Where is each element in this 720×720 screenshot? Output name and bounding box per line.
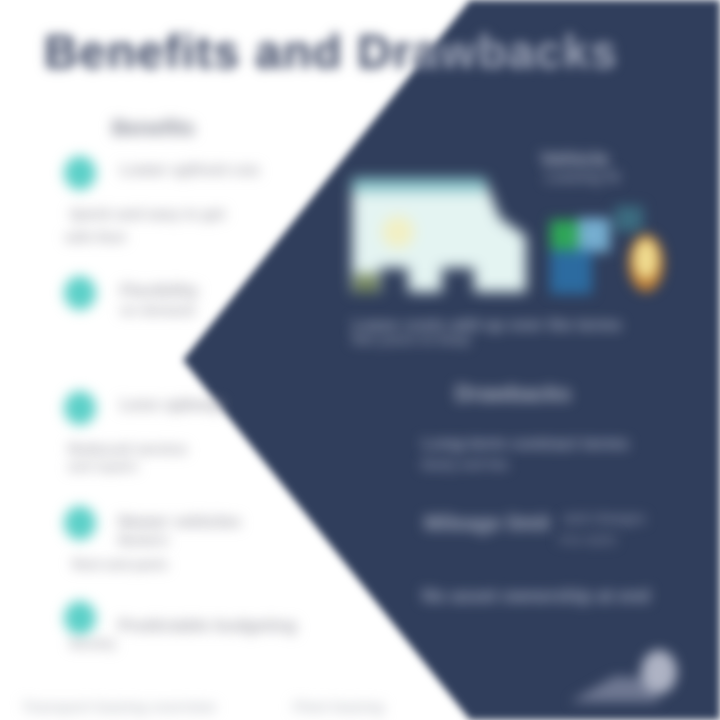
heading: drawbacks list: Drawbacks xyxy=(455,381,571,406)
panel: drawbacks: Not yours to keep xyxy=(352,331,470,347)
benefit 2 text: Flexibility xyxy=(120,281,198,300)
illustration: truck xyxy=(341,168,537,303)
footer right: Fleet leasing xyxy=(293,699,384,716)
drawback 1 xyxy=(418,433,632,475)
benefit 3: Reduced service xyxy=(68,441,187,458)
benefit 3 xyxy=(55,382,226,477)
icon: check xyxy=(64,506,96,540)
benefit 4 text: Newer vehicles xyxy=(118,512,241,531)
benefit 2: on demand xyxy=(120,302,195,318)
drawback 2 xyxy=(418,508,646,548)
benefit 1 detail xyxy=(63,204,228,248)
benefit 4: Modern xyxy=(118,532,169,548)
benefit 5 xyxy=(55,592,300,654)
illustration: person xyxy=(542,200,648,301)
panel: drawbacks: Leasing fit xyxy=(545,169,620,186)
benefit 1 detail: Quick and easy to get xyxy=(70,206,225,223)
icon: check xyxy=(64,276,96,310)
title: Benefits and Drawbacks xyxy=(44,25,618,78)
heading: drawbacks: Vehicle xyxy=(540,149,609,171)
heading: benefits: Benefits xyxy=(112,117,195,140)
icon: check xyxy=(64,391,96,425)
drawback 2: Mileage limit xyxy=(424,512,550,535)
panel: benefits xyxy=(22,113,385,717)
drawback 1: Early exit fee xyxy=(422,456,508,472)
benefit 5 text: Predictable budgeting xyxy=(118,616,297,635)
icon: check xyxy=(64,156,96,190)
title: Benefits and Drawbacks xyxy=(44,25,618,78)
icon: check xyxy=(64,601,96,635)
benefit 3: and repairs xyxy=(68,459,138,474)
benefit 1 xyxy=(55,147,262,199)
panel: drawbacks xyxy=(341,146,672,350)
footer left: Transport leasing overview xyxy=(22,699,215,716)
drawback 3: No asset ownership at end xyxy=(422,586,650,606)
illustration: coin xyxy=(620,226,672,300)
benefit 2 xyxy=(55,267,201,321)
benefit 3 text: Less upkeep xyxy=(120,395,223,414)
drawback 2: and charges xyxy=(563,510,645,526)
benefit 1 text: Lower upfront cos xyxy=(120,162,260,179)
benefit 5: Monthly xyxy=(70,637,116,651)
drawback 2: may apply xyxy=(558,532,617,546)
caption: Lease costs add up over the terms xyxy=(352,317,622,334)
benefit 4: fleet and parts xyxy=(72,556,168,572)
benefit 1 detail: with fleet xyxy=(65,229,126,245)
benefit 4 xyxy=(55,497,243,576)
drawback 1: Long-term contract terms xyxy=(422,434,629,453)
icon: bottom right logo xyxy=(572,642,685,708)
